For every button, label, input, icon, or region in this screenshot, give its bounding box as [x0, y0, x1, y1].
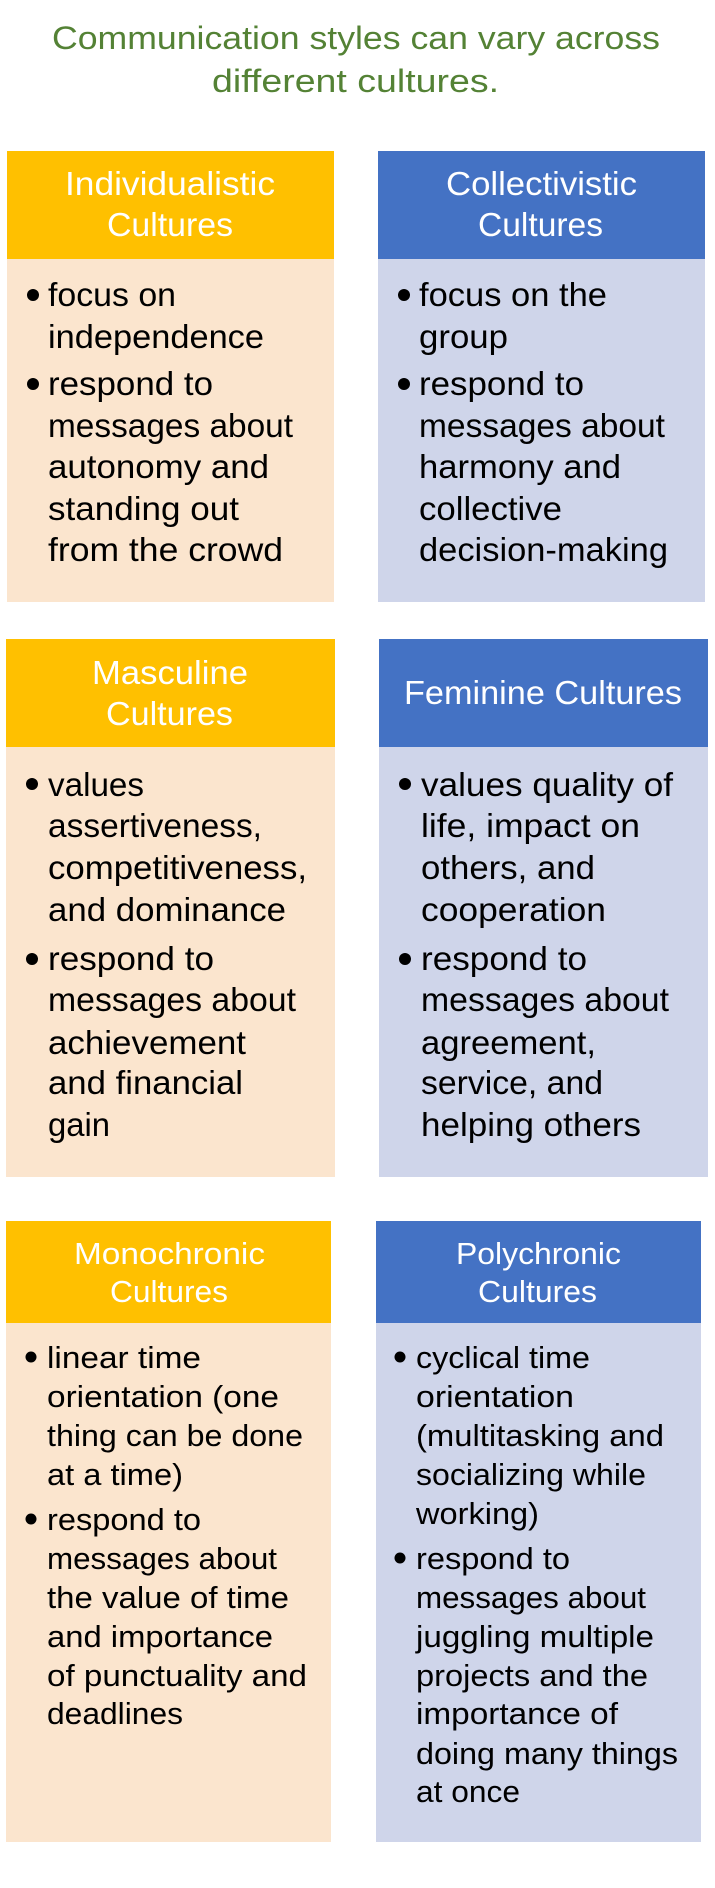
- bullet: respond to multitasking messages: importance of: [416, 1696, 618, 1731]
- header: masculine cultures: [6, 639, 335, 747]
- bullet: values assertiveness: assertiveness,: [48, 807, 262, 844]
- panel: individualistic cultures: [7, 151, 334, 602]
- bullet: values quality of life: cooperation: [421, 891, 606, 928]
- title: different cultures.: [212, 63, 499, 99]
- bullet: respond to multitasking messages: [394, 1541, 678, 1809]
- bullet: respond to punctuality messages: messages about: [47, 1541, 277, 1576]
- bullet: respond to achievement messages: and financial: [48, 1064, 243, 1101]
- body: masculine traits: [6, 747, 335, 1177]
- panel: collectivistic cultures: [378, 151, 705, 602]
- bullet: linear time orientation: at a time): [47, 1457, 183, 1492]
- header: feminine cultures: [379, 639, 708, 747]
- bullet: focus on independence: [27, 276, 264, 355]
- bullet: respond to multitasking messages: respond to: [416, 1541, 570, 1576]
- bullet: values assertiveness: and dominance: [48, 891, 286, 928]
- bullet: values quality of life: life, impact on: [421, 807, 640, 844]
- bullet: respond to punctuality messages: the value of time: [47, 1580, 289, 1615]
- bullet: focus on independence: independence: [48, 318, 264, 355]
- header: individualistic cultures: [7, 151, 334, 259]
- bullet: respond to achievement messages: respond to: [48, 940, 214, 977]
- bullet: values assertiveness: [26, 766, 307, 928]
- bullet: respond to achievement messages: messages about: [48, 981, 296, 1018]
- bullet: cyclical time orientation: cyclical time: [416, 1340, 590, 1375]
- bullet: respond to autonomy messages: from the crowd: [48, 531, 283, 568]
- header: monochronic cultures: [6, 1221, 331, 1323]
- header: masculine cultures: Cultures: [106, 695, 233, 732]
- bullet: respond to punctuality messages: respond to: [47, 1502, 201, 1537]
- bullet: respond to autonomy messages: [27, 365, 293, 568]
- bullet: respond to punctuality messages: deadlines: [47, 1696, 183, 1731]
- bullet: respond to autonomy messages: messages about: [48, 407, 293, 444]
- bullet: respond to autonomy messages: autonomy and: [48, 448, 269, 485]
- header: polychronic cultures: Cultures: [478, 1274, 597, 1309]
- body: feminine traits: [379, 747, 708, 1177]
- bullet: values quality of life: values quality of: [421, 766, 674, 803]
- bullet: respond to punctuality messages: of punctuality and: [47, 1658, 307, 1693]
- bullet: respond to agreement messages: [399, 940, 669, 1143]
- bullet: respond to harmony messages: messages about: [419, 407, 665, 444]
- bullet: respond to achievement messages: [26, 940, 296, 1143]
- bullet: respond to agreement messages: helping others: [421, 1106, 641, 1143]
- panel: feminine cultures: [379, 639, 708, 1177]
- bullet: respond to harmony messages: collective: [419, 490, 562, 527]
- header: polychronic cultures: Polychronic: [456, 1236, 621, 1271]
- bullet: respond to harmony messages: harmony and: [419, 448, 621, 485]
- bullet: linear time orientation: thing can be done: [47, 1418, 303, 1453]
- bullet: respond to harmony messages: decision-making: [419, 531, 668, 568]
- header: collectivistic cultures: Cultures: [478, 206, 603, 243]
- bullet: respond to punctuality messages: [26, 1502, 307, 1731]
- header: polychronic cultures: [376, 1221, 701, 1323]
- bullet: respond to multitasking messages: messages about: [416, 1580, 646, 1615]
- bullet: cyclical time orientation: working): [415, 1496, 539, 1531]
- bullet: linear time orientation: orientation (one: [47, 1379, 279, 1414]
- bullet: cyclical time orientation: socializing while: [416, 1457, 646, 1492]
- header: monochronic cultures: Monochronic: [74, 1236, 265, 1271]
- bullet: values assertiveness: values: [48, 766, 144, 803]
- bullet: focus on the group: group: [419, 318, 508, 355]
- bullet: cyclical time orientation: [394, 1340, 664, 1531]
- bullet: focus on the group: focus on the: [419, 276, 607, 313]
- header: feminine cultures: Feminine Cultures: [404, 674, 682, 711]
- bullet: respond to autonomy messages: standing out: [48, 490, 239, 527]
- bullet: values quality of life: others, and: [421, 849, 595, 886]
- bullet: respond to autonomy messages: respond to: [48, 365, 213, 402]
- header: individualistic cultures: Individualistic: [65, 165, 275, 202]
- bullet: focus on independence: focus on: [48, 276, 176, 313]
- title: Communication styles can vary across: [52, 20, 660, 56]
- panel: masculine cultures: [6, 639, 335, 1177]
- body: individualistic traits: [7, 259, 334, 602]
- bullet: respond to harmony messages: [398, 365, 668, 568]
- bullet: linear time orientation: [26, 1340, 303, 1492]
- bullet: respond to agreement messages: service, and: [421, 1064, 603, 1101]
- header: individualistic cultures: Cultures: [107, 206, 233, 243]
- bullet: linear time orientation: linear time: [47, 1340, 201, 1375]
- body: polychronic traits: [376, 1323, 701, 1842]
- bullet: cyclical time orientation: (multitasking and: [416, 1418, 664, 1453]
- bullet: respond to multitasking messages: juggling multiple: [415, 1619, 654, 1654]
- bullet: values quality of life: [399, 766, 674, 928]
- body: collectivistic traits: [378, 259, 705, 602]
- bullet: respond to punctuality messages: and importance: [47, 1619, 273, 1654]
- bullet: respond to harmony messages: respond to: [419, 365, 584, 402]
- bullet: respond to multitasking messages: doing many things: [416, 1736, 678, 1771]
- header: collectivistic cultures: [378, 151, 705, 259]
- panel: polychronic cultures: [376, 1221, 701, 1842]
- body: monochronic traits: [6, 1323, 331, 1842]
- bullet: respond to agreement messages: messages about: [421, 981, 669, 1018]
- bullet: values assertiveness: competitiveness,: [48, 849, 307, 886]
- bullet: focus on the group: [398, 276, 607, 355]
- bullet: respond to agreement messages: respond to: [421, 940, 587, 977]
- bullet: respond to achievement messages: gain: [48, 1106, 110, 1143]
- bullet: cyclical time orientation: orientation: [416, 1379, 574, 1414]
- bullet: respond to multitasking messages: at once: [416, 1774, 520, 1809]
- bullet: respond to agreement messages: agreement,: [421, 1024, 596, 1061]
- panel: monochronic cultures: [6, 1221, 331, 1842]
- header: collectivistic cultures: Collectivistic: [446, 165, 637, 202]
- header: masculine cultures: Masculine: [92, 654, 248, 691]
- bullet: respond to achievement messages: achievement: [48, 1024, 246, 1061]
- title: [52, 20, 660, 99]
- bullet: respond to multitasking messages: projects and the: [416, 1658, 648, 1693]
- header: monochronic cultures: Cultures: [110, 1274, 228, 1309]
